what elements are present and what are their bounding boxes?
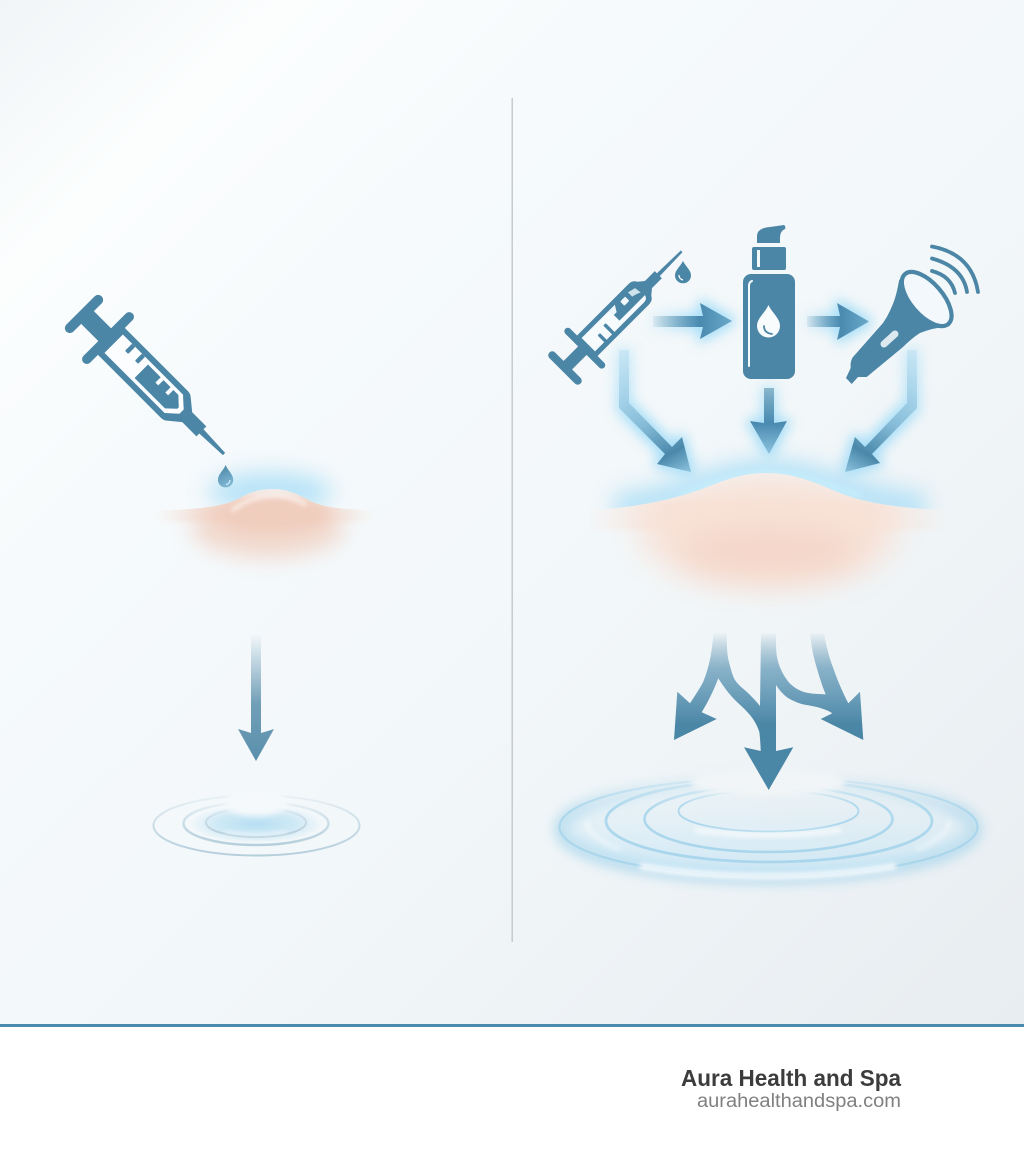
icon: syringe: [548, 234, 699, 385]
glow behind skin: [615, 472, 925, 508]
ripples: [560, 768, 978, 877]
brand name: Aura Health and Spa: [681, 1065, 901, 1091]
footer accent line: [0, 1024, 1024, 1027]
footer band: [0, 1024, 1024, 1154]
panel: single treatment: [63, 293, 385, 856]
arrow: downward: [238, 634, 274, 761]
icon: ultrasound device: [846, 246, 978, 384]
center divider: [512, 98, 513, 942]
skin mound: [590, 474, 945, 586]
arrow: bottle to skin: [750, 388, 787, 454]
arrow: syringe to skin: [619, 350, 691, 472]
icon: pump bottle: [743, 225, 795, 379]
skin bump: [150, 495, 385, 557]
icon: droplet: [675, 261, 691, 283]
blue glow above skin: [208, 472, 332, 512]
ripples: [154, 790, 360, 856]
arrow: bottle to device: [807, 303, 869, 340]
brand website: aurahealthandspa.com: [697, 1091, 901, 1112]
arrow: syringe to bottle: [653, 303, 732, 339]
icon: syringe: [63, 293, 245, 475]
icon: droplet: [218, 465, 233, 487]
arrows: branching downward: [674, 633, 863, 790]
arrow: device to skin: [845, 350, 917, 472]
panel: combined treatments: [548, 225, 978, 877]
